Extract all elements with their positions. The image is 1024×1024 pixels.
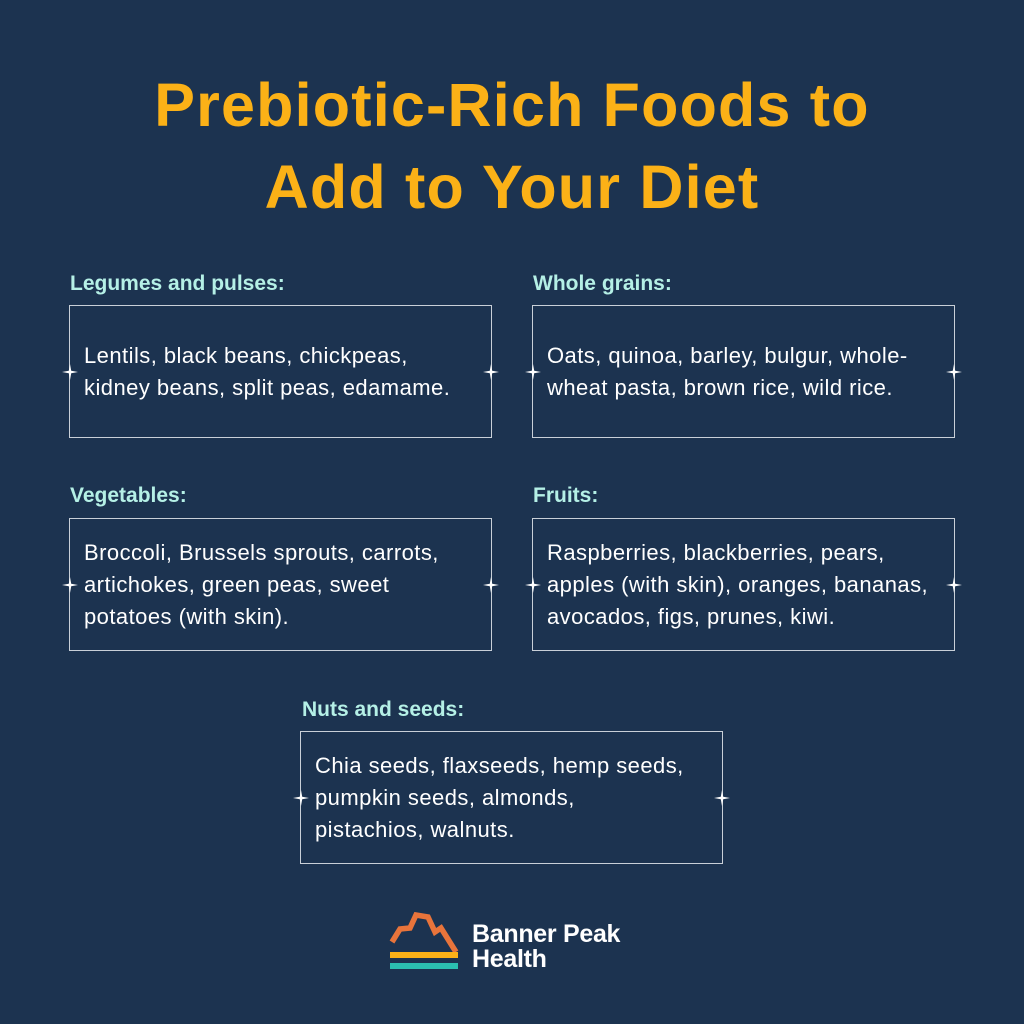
heading: whole grains: Whole grains: bbox=[533, 272, 672, 295]
panel: legumes: kidney beans, split peas, edamame. bbox=[84, 374, 450, 400]
panel: whole grains: Oats, quinoa, barley, bulgur, whole- bbox=[547, 342, 908, 368]
title: Prebiotic-Rich Foods to bbox=[154, 71, 870, 139]
brand name: Banner Peak bbox=[472, 920, 620, 948]
panel: legumes bbox=[69, 305, 492, 438]
panel: fruits: Raspberries, blackberries, pears, bbox=[547, 540, 885, 564]
panel: vegetables: artichokes, green peas, sweet bbox=[84, 572, 389, 596]
panel: nuts and seeds: pumpkin seeds, almonds, bbox=[315, 784, 575, 810]
panel: whole grains bbox=[532, 305, 955, 438]
panel: vegetables: Broccoli, Brussels sprouts, carrots, bbox=[84, 540, 439, 564]
panel: whole grains: wheat pasta, brown rice, wild rice. bbox=[547, 374, 893, 400]
panel: fruits: avocados, figs, prunes, kiwi. bbox=[547, 604, 835, 628]
icon: mountain logo bbox=[390, 912, 458, 969]
logo bbox=[390, 912, 620, 973]
heading: legumes: Legumes and pulses: bbox=[70, 272, 285, 295]
panel: fruits: apples (with skin), oranges, bananas, bbox=[547, 572, 928, 596]
panel: nuts and seeds: pistachios, walnuts. bbox=[315, 816, 515, 842]
heading: fruits: Fruits: bbox=[533, 484, 598, 507]
panel: vegetables bbox=[69, 518, 492, 651]
title bbox=[154, 71, 870, 221]
heading: vegetables: Vegetables: bbox=[70, 484, 187, 507]
heading: nuts and seeds: Nuts and seeds: bbox=[302, 698, 464, 721]
panel: legumes: Lentils, black beans, chickpeas, bbox=[84, 342, 408, 368]
brand name bbox=[472, 920, 620, 973]
panel: nuts and seeds bbox=[300, 731, 723, 864]
brand name: Health bbox=[472, 945, 547, 973]
title: Add to Your Diet bbox=[265, 153, 759, 221]
panel: fruits bbox=[532, 518, 955, 651]
panel: vegetables: potatoes (with skin). bbox=[84, 604, 289, 628]
panel: nuts and seeds: Chia seeds, flaxseeds, hemp seeds, bbox=[315, 752, 684, 778]
